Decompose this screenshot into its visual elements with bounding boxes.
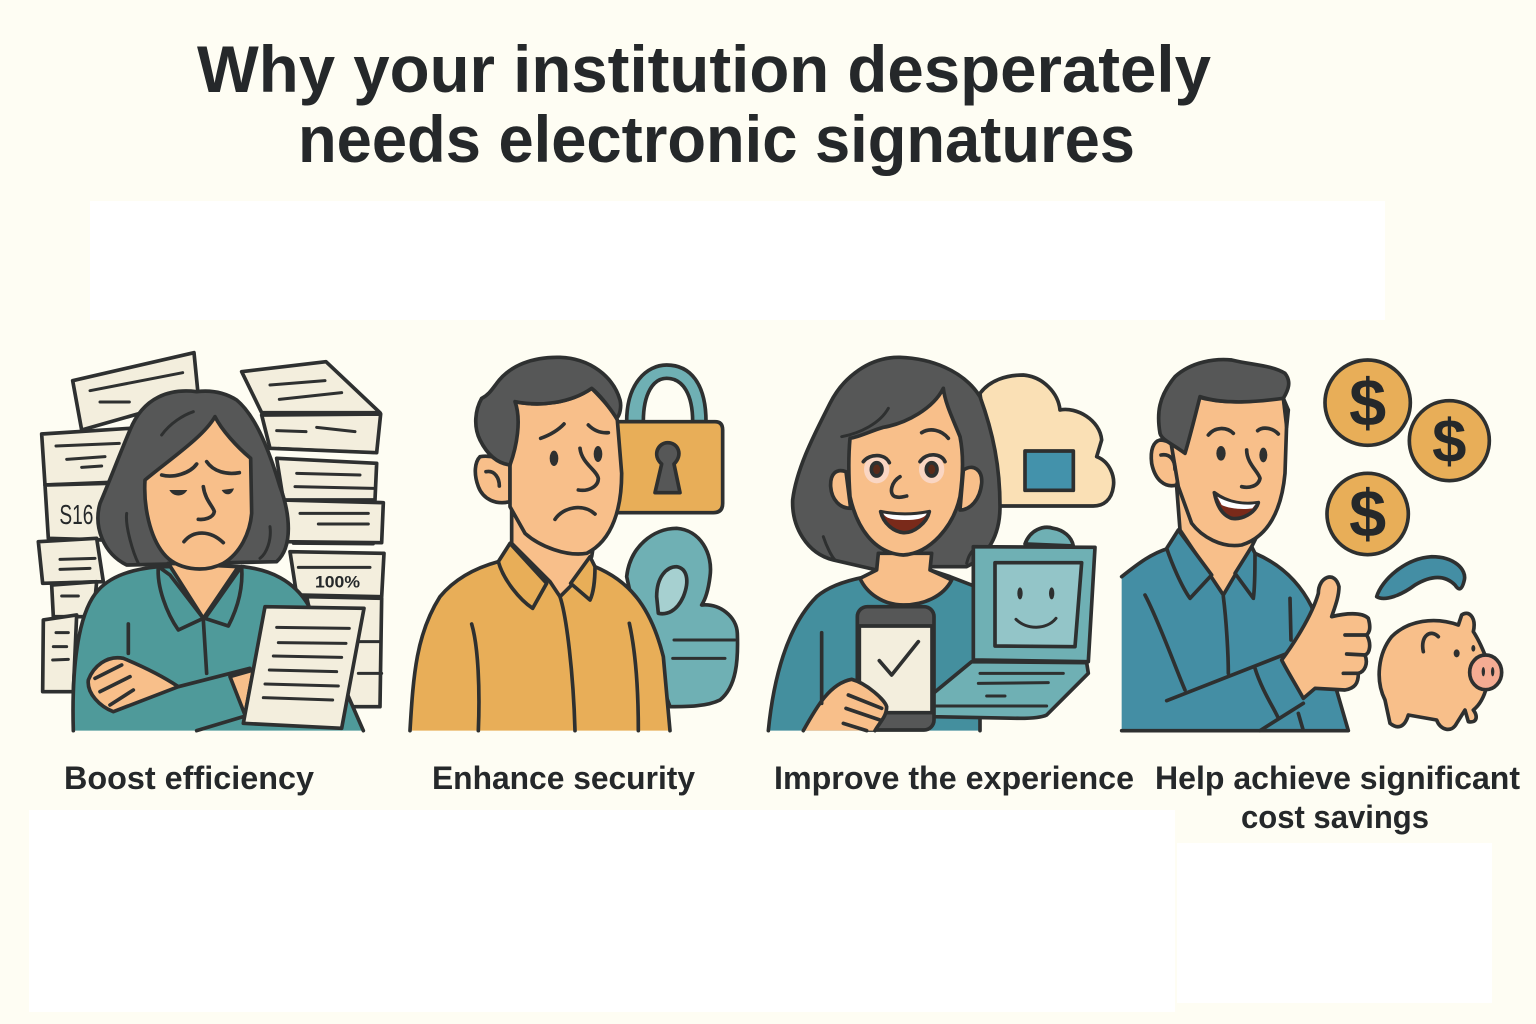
icon: man hair — [1159, 360, 1289, 453]
panel: blank lower right block — [1177, 843, 1492, 1003]
icon: right paper stack — [242, 362, 384, 707]
icon: gold coins: $ — [1349, 478, 1386, 552]
icon: arm and sleeve — [1167, 652, 1303, 731]
panel: cost savings illustration — [1122, 360, 1502, 731]
heading: help achieve significant cost savings: Help achieve significant — [1155, 760, 1520, 796]
heading: enhance security: Enhance security — [432, 760, 695, 796]
icon: woman collar — [128, 567, 242, 673]
icon: man neck — [512, 507, 600, 597]
icon: phone with check — [857, 607, 934, 730]
icon: man neck — [1177, 487, 1272, 595]
icon: left paper stack — [38, 353, 198, 692]
icon: held paper — [243, 607, 364, 728]
icon: woman neck — [168, 563, 238, 618]
icon: man collar — [1145, 530, 1291, 690]
icon: body — [768, 570, 980, 731]
icon: man ear — [1151, 440, 1185, 486]
icon: neck — [860, 553, 952, 605]
icon: ears — [831, 467, 982, 510]
icon: woman face — [145, 417, 252, 569]
icon: woman body — [73, 567, 363, 731]
heading: boost efficiency: Boost efficiency — [64, 760, 314, 796]
icon: man face — [510, 388, 622, 554]
icon: man body — [410, 562, 670, 731]
icon: face — [849, 388, 962, 555]
panel: enhance security illustration — [410, 357, 738, 731]
heading: help achieve significant cost savings: cost savings — [1241, 799, 1429, 835]
icon: laptop — [933, 527, 1095, 718]
icon: man hair — [476, 357, 621, 465]
heading: help achieve significant cost savings — [1155, 760, 1520, 835]
icon: man facial features — [1161, 428, 1278, 519]
icon: gold coins: $ — [1432, 407, 1466, 476]
icon: hand and sleeve — [803, 633, 887, 731]
panel: blank intro block — [90, 201, 1385, 320]
icon: man face — [1170, 397, 1287, 546]
icon: thumbs up hand — [1282, 577, 1370, 698]
icon: man collar — [472, 543, 638, 731]
icon: left paper stack: S16 — [59, 499, 93, 530]
icon: teal coin slot arc — [1377, 557, 1465, 598]
icon: cloud — [980, 375, 1114, 506]
panel: blank lower left block — [29, 810, 1175, 1012]
title — [197, 32, 1211, 176]
panel: improve the experience illustration — [768, 357, 1114, 731]
icon: woman hair strands and features — [126, 412, 270, 563]
icon: teal shield shape — [627, 528, 738, 707]
icon: man body — [1122, 548, 1348, 731]
icon: man ear — [475, 456, 510, 503]
icon: right paper stack: 100% — [315, 572, 360, 591]
icon: hair — [793, 357, 1000, 570]
icon: gold coins — [1325, 360, 1489, 555]
title: needs electronic signatures — [298, 102, 1135, 176]
title: Why your institution desperately — [197, 32, 1211, 106]
icon: crossed arms and hand — [88, 658, 253, 731]
heading: improve the experience: Improve the experience — [774, 760, 1134, 796]
icon: man facial features — [486, 424, 608, 519]
icon: woman hair — [98, 391, 288, 565]
panel: boost efficiency illustration — [38, 353, 384, 731]
icon: facial features — [823, 408, 973, 563]
icon: piggy bank — [1379, 613, 1502, 729]
icon: padlock — [615, 365, 723, 513]
icon: gold coins: $ — [1349, 366, 1386, 440]
